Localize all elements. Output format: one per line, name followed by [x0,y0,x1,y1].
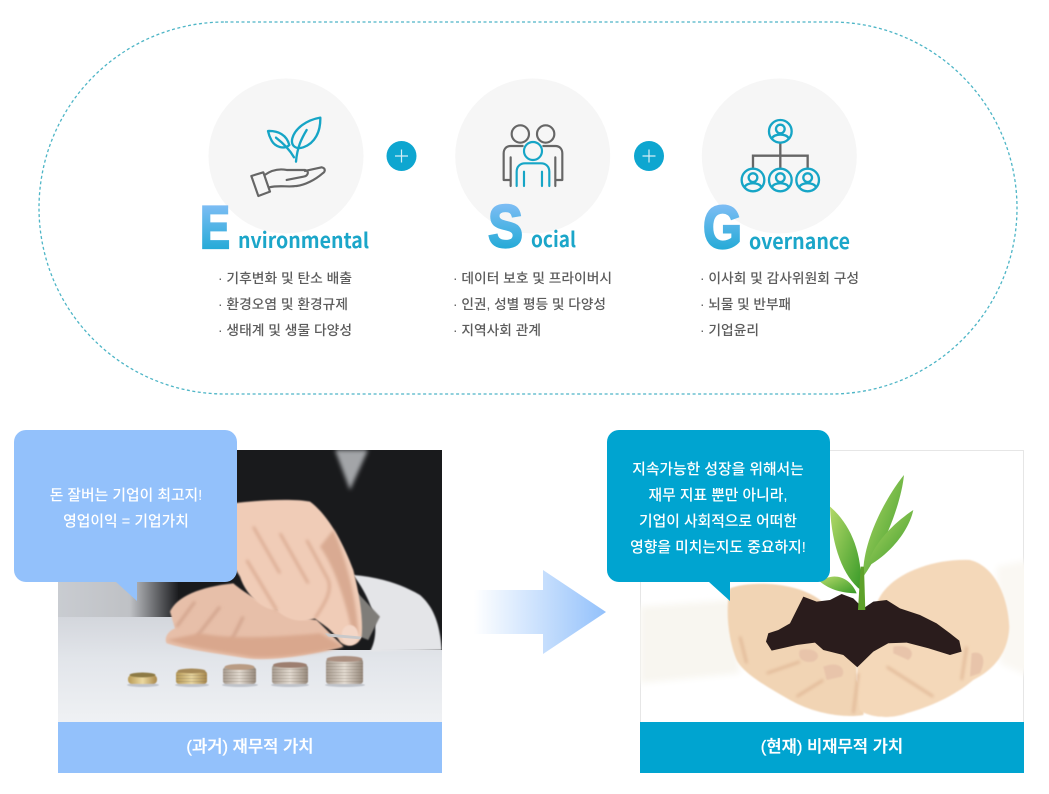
arrow: past to present [474,570,606,654]
plus icon 1 [386,141,416,171]
photo: hand stacking coins [58,450,442,722]
speech bubble: present [607,430,830,601]
speech bubble: past: 돈 잘버는 기업이 최고지! [50,487,202,504]
left hand [728,584,867,716]
list: social topics: · 인권, 성별 평등 및 다양성 [453,297,606,312]
speech bubble: past [14,430,237,601]
back hand [166,583,343,659]
list: governance topics: · 이사회 및 감사위원회 구성 [700,271,859,286]
speech bubble: present: 재무 지표 뿐만 아니라, [649,487,787,504]
sleeves [640,600,740,683]
icon circle: governance [702,78,857,234]
letter S: S [488,193,523,260]
panel: present non-financial value [607,430,1030,773]
speech bubble: past: 영업이익 = 기업가치 [63,513,189,530]
panel: Environmental [200,78,369,338]
letter G: G [703,194,742,261]
speech bubble: present: 영향을 미치는지도 중요하지! [630,539,806,556]
icon: hand with sprout [251,118,325,196]
right hand [857,560,1009,717]
leaves [830,507,861,590]
word: overnance: overnance [749,226,850,256]
list: social topics: · 지역사회 관계 [453,323,541,338]
caption bar: past [58,722,442,773]
coin stacks [127,656,365,687]
front hand [230,500,362,646]
caption bar: present [640,722,1024,773]
dashed pill frame [39,22,1017,394]
plus icon 2 [634,141,664,171]
icon circle: environmental [208,78,364,234]
speech bubble: present: 기업이 사회적으로 어떠한 [639,513,797,530]
list: environmental topics: · 생태계 및 생물 다양성 [218,323,352,338]
list: environmental topics [218,271,352,338]
icon: three people [504,125,562,186]
list: environmental topics: · 기후변화 및 탄소 배출 [218,271,352,286]
cuff [353,575,442,652]
panel: Social [453,78,612,338]
list: governance topics [700,271,859,338]
word: ocial: ocial [531,224,576,254]
panel: Governance [700,78,859,338]
speech bubble: present: 지속가능한 성장을 위해서는 [632,461,804,478]
list: governance topics: · 뇌물 및 반부패 [700,297,791,312]
panel: past financial value [14,430,442,773]
letter E: E [200,194,230,261]
list: social topics [453,271,612,338]
word: nvironmental: nvironmental [238,225,369,255]
list: environmental topics: · 환경오염 및 환경규제 [218,297,348,312]
caption bar: past: (과거) 재무적 가치 [186,737,314,756]
list: social topics: · 데이터 보호 및 프라이버시 [453,271,612,286]
soil [766,594,962,667]
photo: hands holding seedling [640,450,1030,722]
icon circle: social [455,78,610,234]
list: governance topics: · 기업윤리 [700,323,759,338]
icon: org chart [742,120,819,191]
caption bar: present: (현재) 비재무적 가치 [761,737,903,756]
